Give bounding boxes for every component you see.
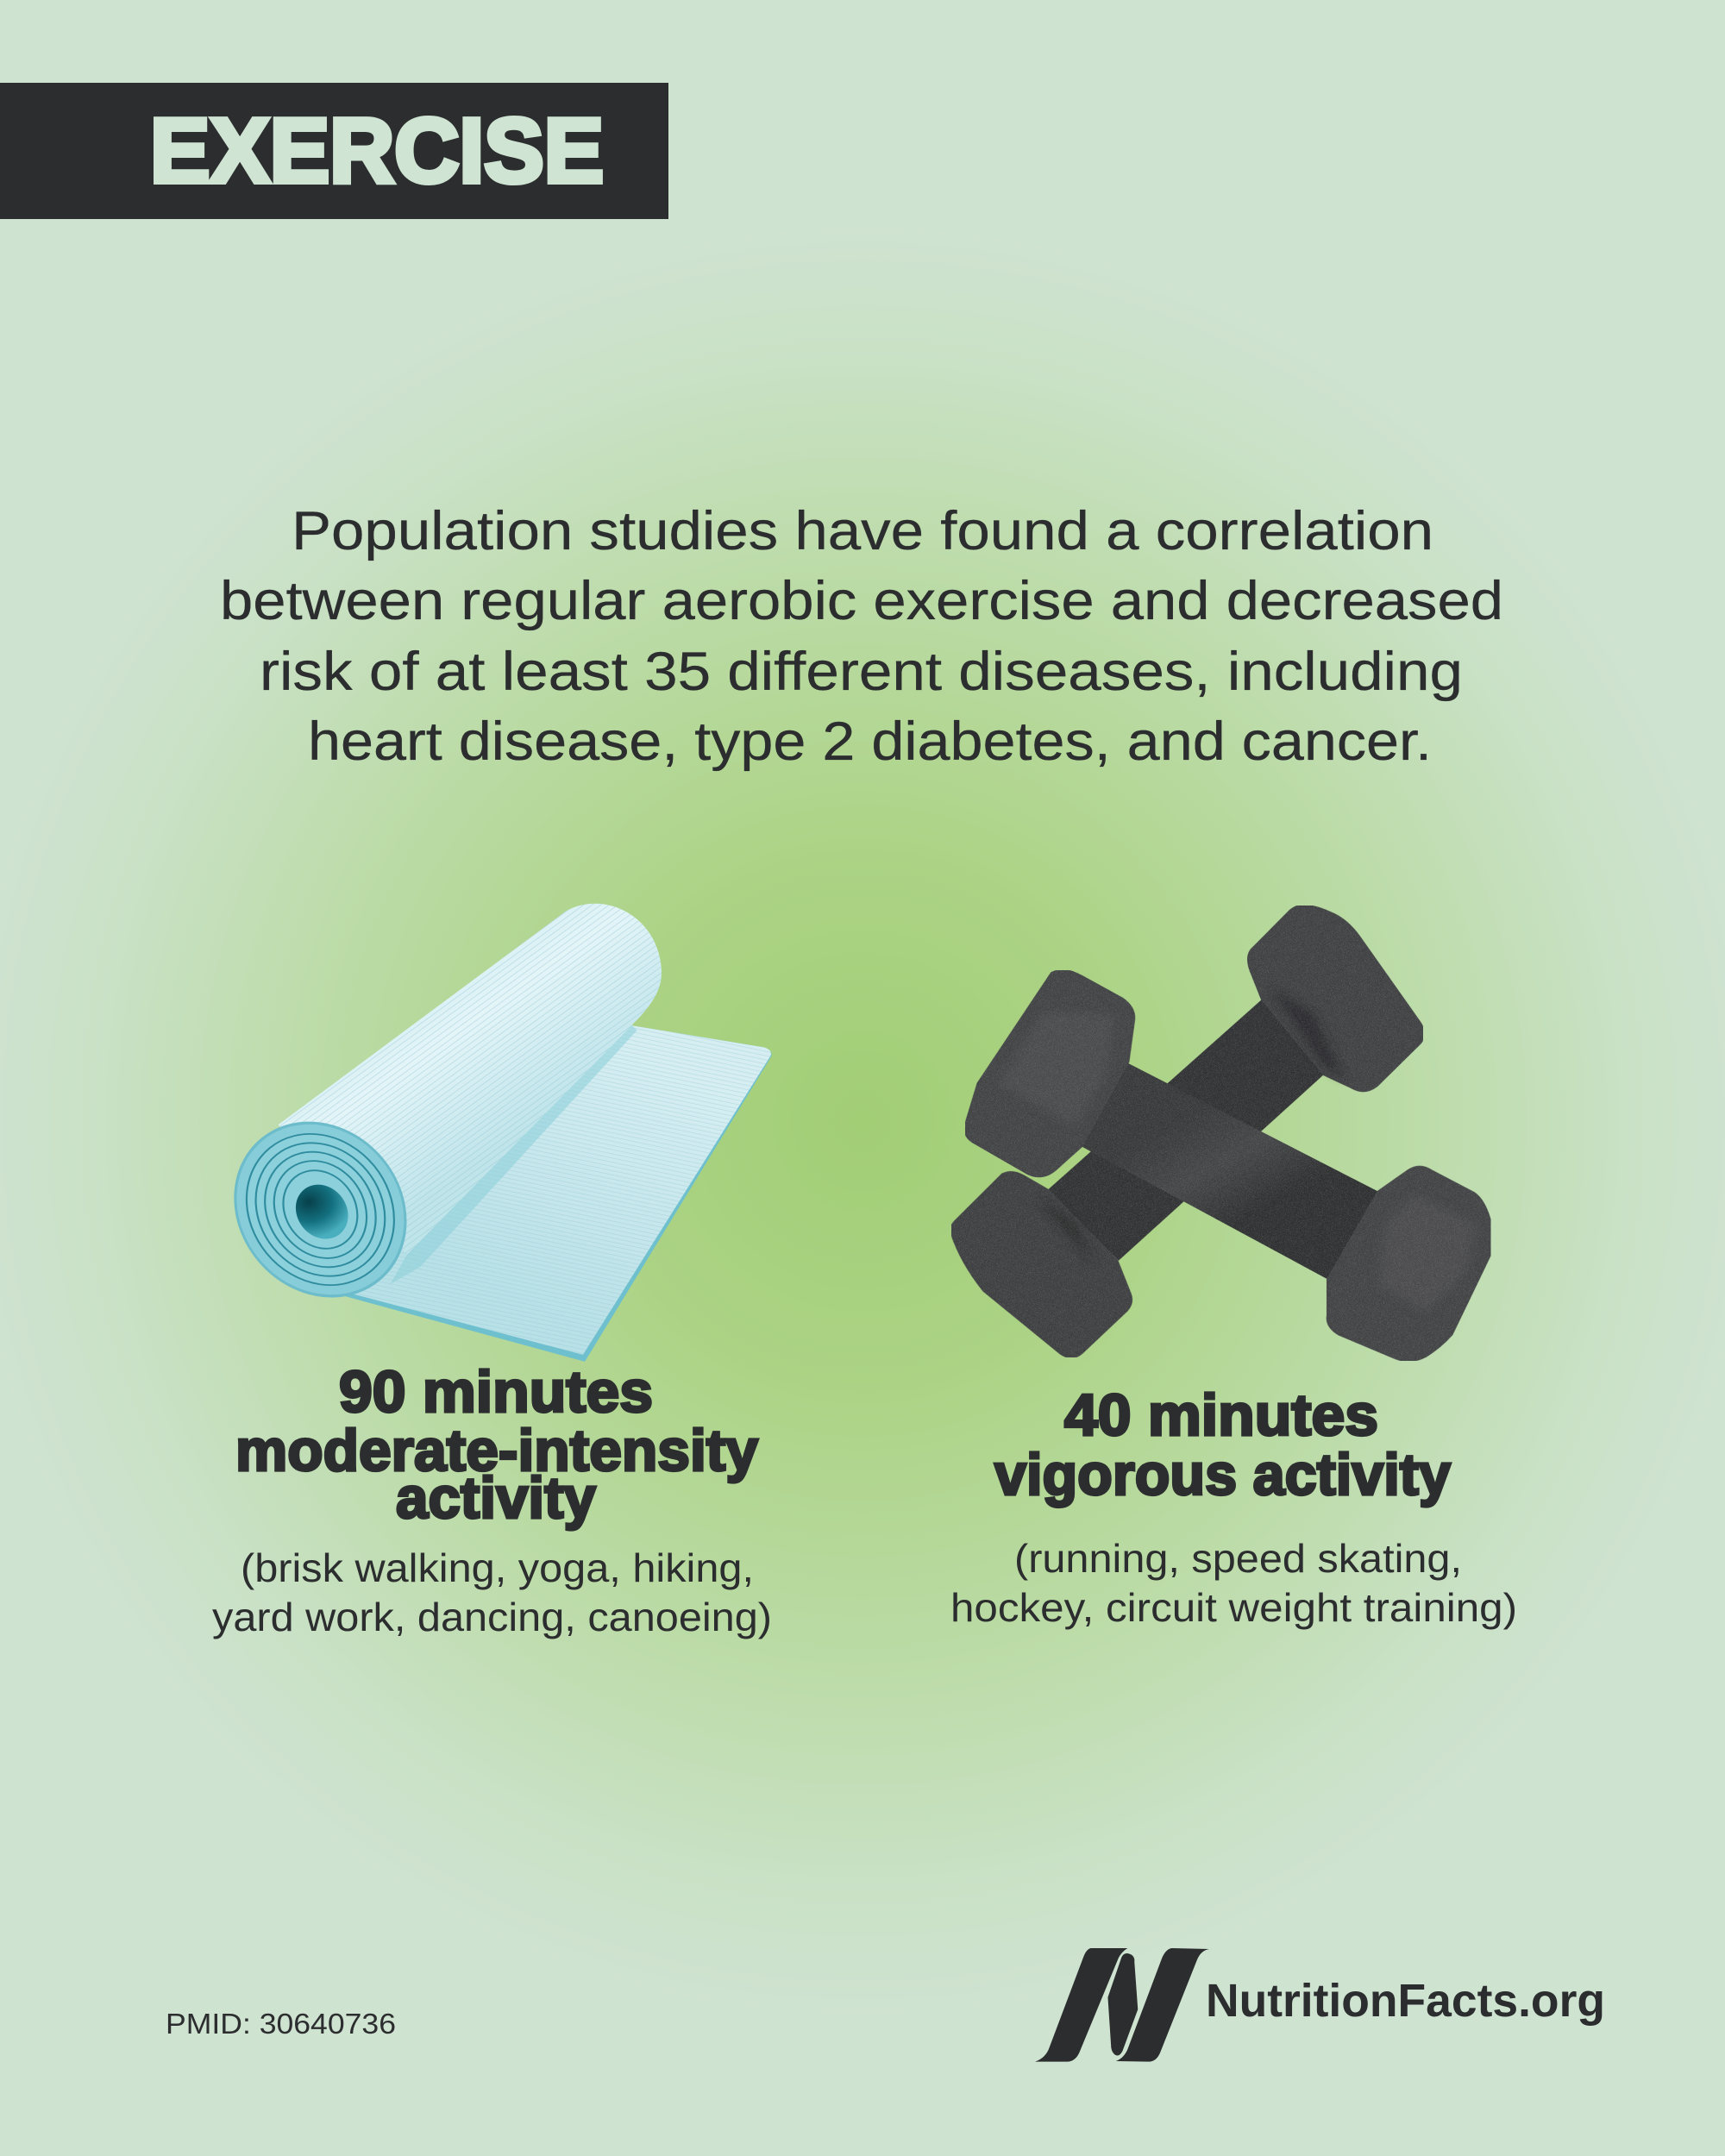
left activity heading [235, 1359, 758, 1531]
front dumbbell [965, 970, 1490, 1361]
right activity examples [950, 1536, 1517, 1630]
left activity heading: 90 minutes [339, 1359, 653, 1425]
intro text block: Population studies have found a correlation [292, 501, 1433, 561]
left activity heading: moderate-intensity [235, 1418, 758, 1483]
intro text block [220, 501, 1503, 772]
left activity examples [212, 1545, 772, 1639]
right activity heading [994, 1382, 1451, 1507]
intro text block: heart disease, type 2 diabetes, and cancer. [308, 711, 1432, 772]
left activity heading: activity [396, 1465, 596, 1531]
left activity examples: yard work, dancing, canoeing) [212, 1595, 772, 1639]
title banner [0, 83, 668, 219]
right activity examples: (running, speed skating, [1014, 1536, 1462, 1581]
icon: N mark [1035, 1948, 1209, 2062]
right activity examples: hockey, circuit weight training) [950, 1585, 1517, 1630]
right activity heading: 40 minutes [1064, 1382, 1378, 1448]
icon: rolled yoga mat [209, 904, 772, 1362]
intro text block: between regular aerobic exercise and decreased [220, 571, 1503, 631]
wordmark: NutritionFacts.org [1206, 1975, 1605, 2027]
icon: crossed dumbbells [951, 906, 1490, 1361]
title: EXERCISE [150, 100, 604, 202]
intro text block: risk of at least 35 different diseases, including [260, 642, 1463, 702]
citation: PMID: 30640736 [166, 2008, 396, 2040]
back dumbbell [951, 906, 1423, 1357]
right activity heading: vigorous activity [994, 1442, 1451, 1507]
left activity examples: (brisk walking, yoga, hiking, [241, 1545, 754, 1590]
logo [1035, 1948, 1605, 2062]
